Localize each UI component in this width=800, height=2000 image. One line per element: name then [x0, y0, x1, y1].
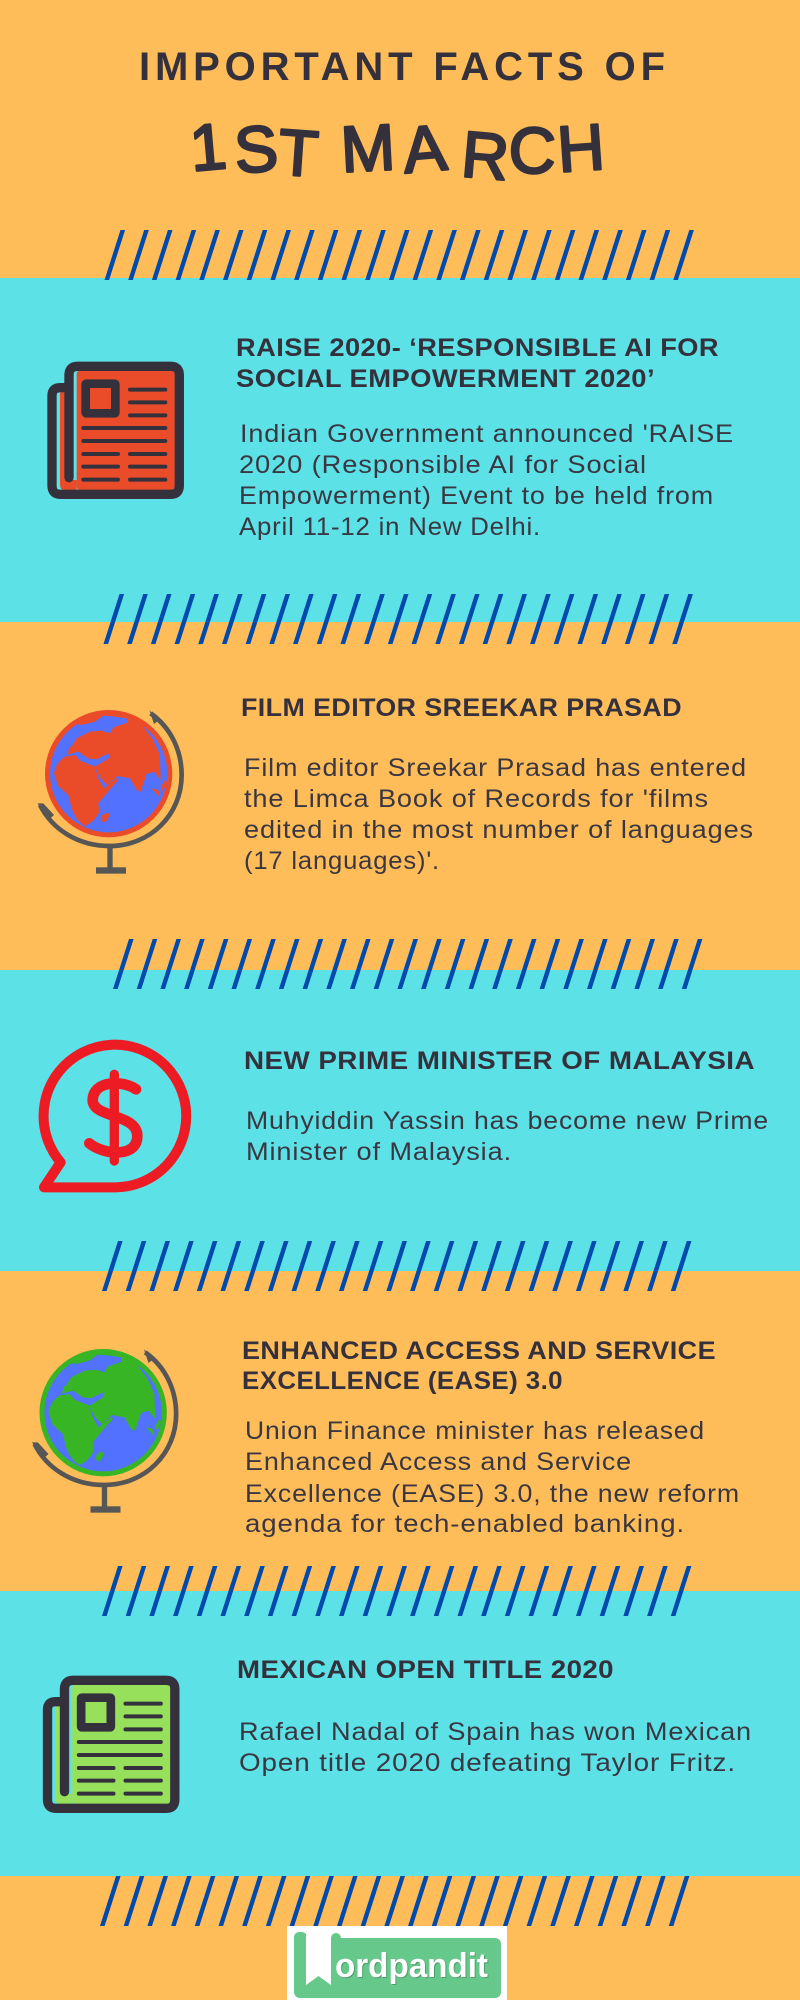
body text: the Limca Book of Records for 'films: [244, 785, 709, 813]
body text: Film editor Sreekar Prasad has entered: [244, 754, 747, 782]
body text: [245, 1417, 740, 1538]
heading: MEXICAN OPEN TITLE 2020: [237, 1656, 614, 1684]
body text: April 11-12 in New Delhi.: [239, 513, 541, 541]
body text: Union Finance minister has released: [245, 1417, 705, 1445]
section 4: EASE 3.0: [32, 1337, 740, 1538]
heading: EXCELLENCE (EASE) 3.0: [242, 1367, 563, 1395]
body text: [246, 1107, 769, 1166]
body text: Minister of Malaysia.: [246, 1138, 512, 1166]
hatch divider 2: [104, 594, 693, 644]
panel: band 3 cyan: [0, 970, 800, 1271]
body text: Open title 2020 defeating Taylor Fritz.: [239, 1749, 736, 1777]
icon: green newspaper: [47, 1680, 175, 1808]
section 3: Malaysia: [44, 1045, 769, 1187]
hatch divider 5: [102, 1566, 691, 1616]
hatch divider 4: [102, 1241, 691, 1291]
body text: [244, 754, 754, 875]
body text: 2020 (Responsible AI for Social: [239, 451, 647, 479]
heading: SOCIAL EMPOWERMENT 2020’: [236, 365, 655, 393]
logo: Wordpandit: ordpandit: [335, 1947, 488, 1985]
hatch divider 1: [104, 230, 694, 280]
heading: NEW PRIME MINISTER OF MALAYSIA: [244, 1047, 755, 1075]
body text: (17 languages)'.: [244, 847, 440, 875]
hatch divider 3: [113, 939, 702, 989]
heading: FILM EDITOR SREEKAR PRASAD: [241, 694, 682, 722]
icon: green globe: [32, 1349, 176, 1513]
body text: agenda for tech-enabled banking.: [245, 1510, 685, 1538]
icon: red globe: [37, 710, 182, 874]
body text: Excellence (EASE) 3.0, the new reform: [245, 1480, 740, 1508]
heading: RAISE 2020- ‘RESPONSIBLE AI FOR: [236, 334, 719, 362]
section 1: RAISE 2020: [52, 334, 734, 541]
title line 1: IMPORTANT FACTS OF: [139, 45, 665, 89]
panel: band 1 cyan: [0, 278, 800, 622]
section 5: Mexican Open: [47, 1656, 752, 1808]
heading: ENHANCED ACCESS AND SERVICE: [242, 1337, 716, 1365]
icon: red newspaper: [52, 366, 179, 494]
heading: [236, 334, 719, 393]
body text: [239, 1718, 752, 1777]
body text: edited in the most number of languages: [244, 816, 754, 844]
title: [139, 45, 665, 194]
panel: band 5 cyan: [0, 1591, 800, 1876]
body text: Empowerment) Event to be held from: [239, 482, 714, 510]
body text: Enhanced Access and Service: [245, 1448, 632, 1476]
hatch divider 6: [100, 1876, 689, 1926]
icon: dollar speech bubble: [44, 1045, 186, 1187]
section 2: Film editor: [37, 694, 754, 875]
logo: Wordpandit: [287, 1926, 507, 2000]
body text: [239, 420, 734, 541]
title line 2: date: 1ST MARCH: [187, 109, 607, 194]
body text: Muhyiddin Yassin has become new Prime: [246, 1107, 769, 1135]
body text: Indian Government announced 'RAISE: [240, 420, 734, 448]
body text: Rafael Nadal of Spain has won Mexican: [239, 1718, 752, 1746]
heading: [242, 1337, 716, 1395]
